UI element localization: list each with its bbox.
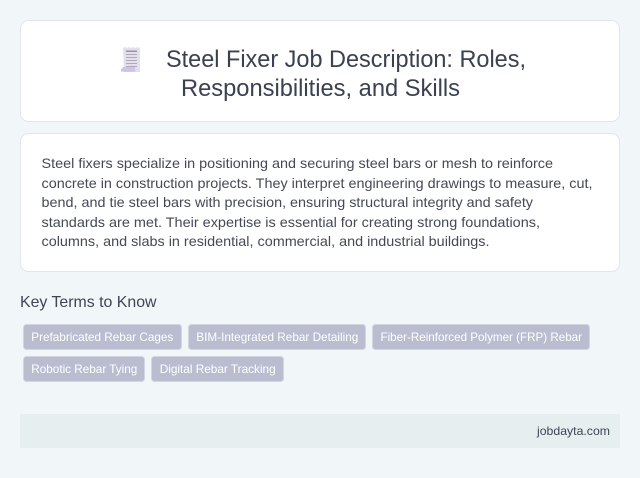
description text: columns, and slabs in residential, commercial, and industrial buildings.: [42, 233, 490, 249]
tag: digital rebar tracking: Digital Rebar Tracking: [160, 362, 276, 376]
tag: BIM-integrated rebar detailing: [188, 324, 366, 350]
tag: robotic rebar tying: Robotic Rebar Tying: [31, 362, 137, 376]
title: Steel Fixer Job Description: Roles,: [166, 46, 526, 73]
heading: key terms: Key Terms to Know: [20, 294, 157, 311]
footer: jobdayta.com: [536, 424, 610, 438]
footer: [20, 414, 620, 448]
description text: [42, 155, 592, 249]
panel: title card: [20, 20, 620, 122]
tag: digital rebar tracking: [152, 356, 284, 382]
tag: robotic rebar tying: [24, 356, 144, 382]
tag: fiber-reinforced polymer rebar: [372, 324, 590, 350]
icon: paper scroll document: [121, 47, 140, 72]
description text: bend, and tie steel bars with precision, ensuring structural integrity and safety: [42, 194, 533, 210]
title: [166, 46, 526, 102]
description text: concrete in construction projects. They interpret engineering drawings to measure, cut,: [42, 175, 592, 191]
tag: fiber-reinforced polymer rebar: Fiber-Reinforced Polymer (FRP) Rebar: [380, 330, 582, 344]
description text: standards are met. Their expertise is essential for creating strong foundations,: [42, 214, 540, 230]
tag: BIM-integrated rebar detailing: BIM-Integrated Rebar Detailing: [196, 330, 358, 344]
description text: Steel fixers specialize in positioning and securing steel bars or mesh to reinforce: [42, 155, 553, 171]
title: Responsibilities, and Skills: [181, 75, 460, 102]
panel: description: [20, 134, 620, 272]
tag: prefabricated rebar cages: [24, 324, 182, 350]
tag: prefabricated rebar cages: Prefabricated Rebar Cages: [31, 330, 173, 344]
